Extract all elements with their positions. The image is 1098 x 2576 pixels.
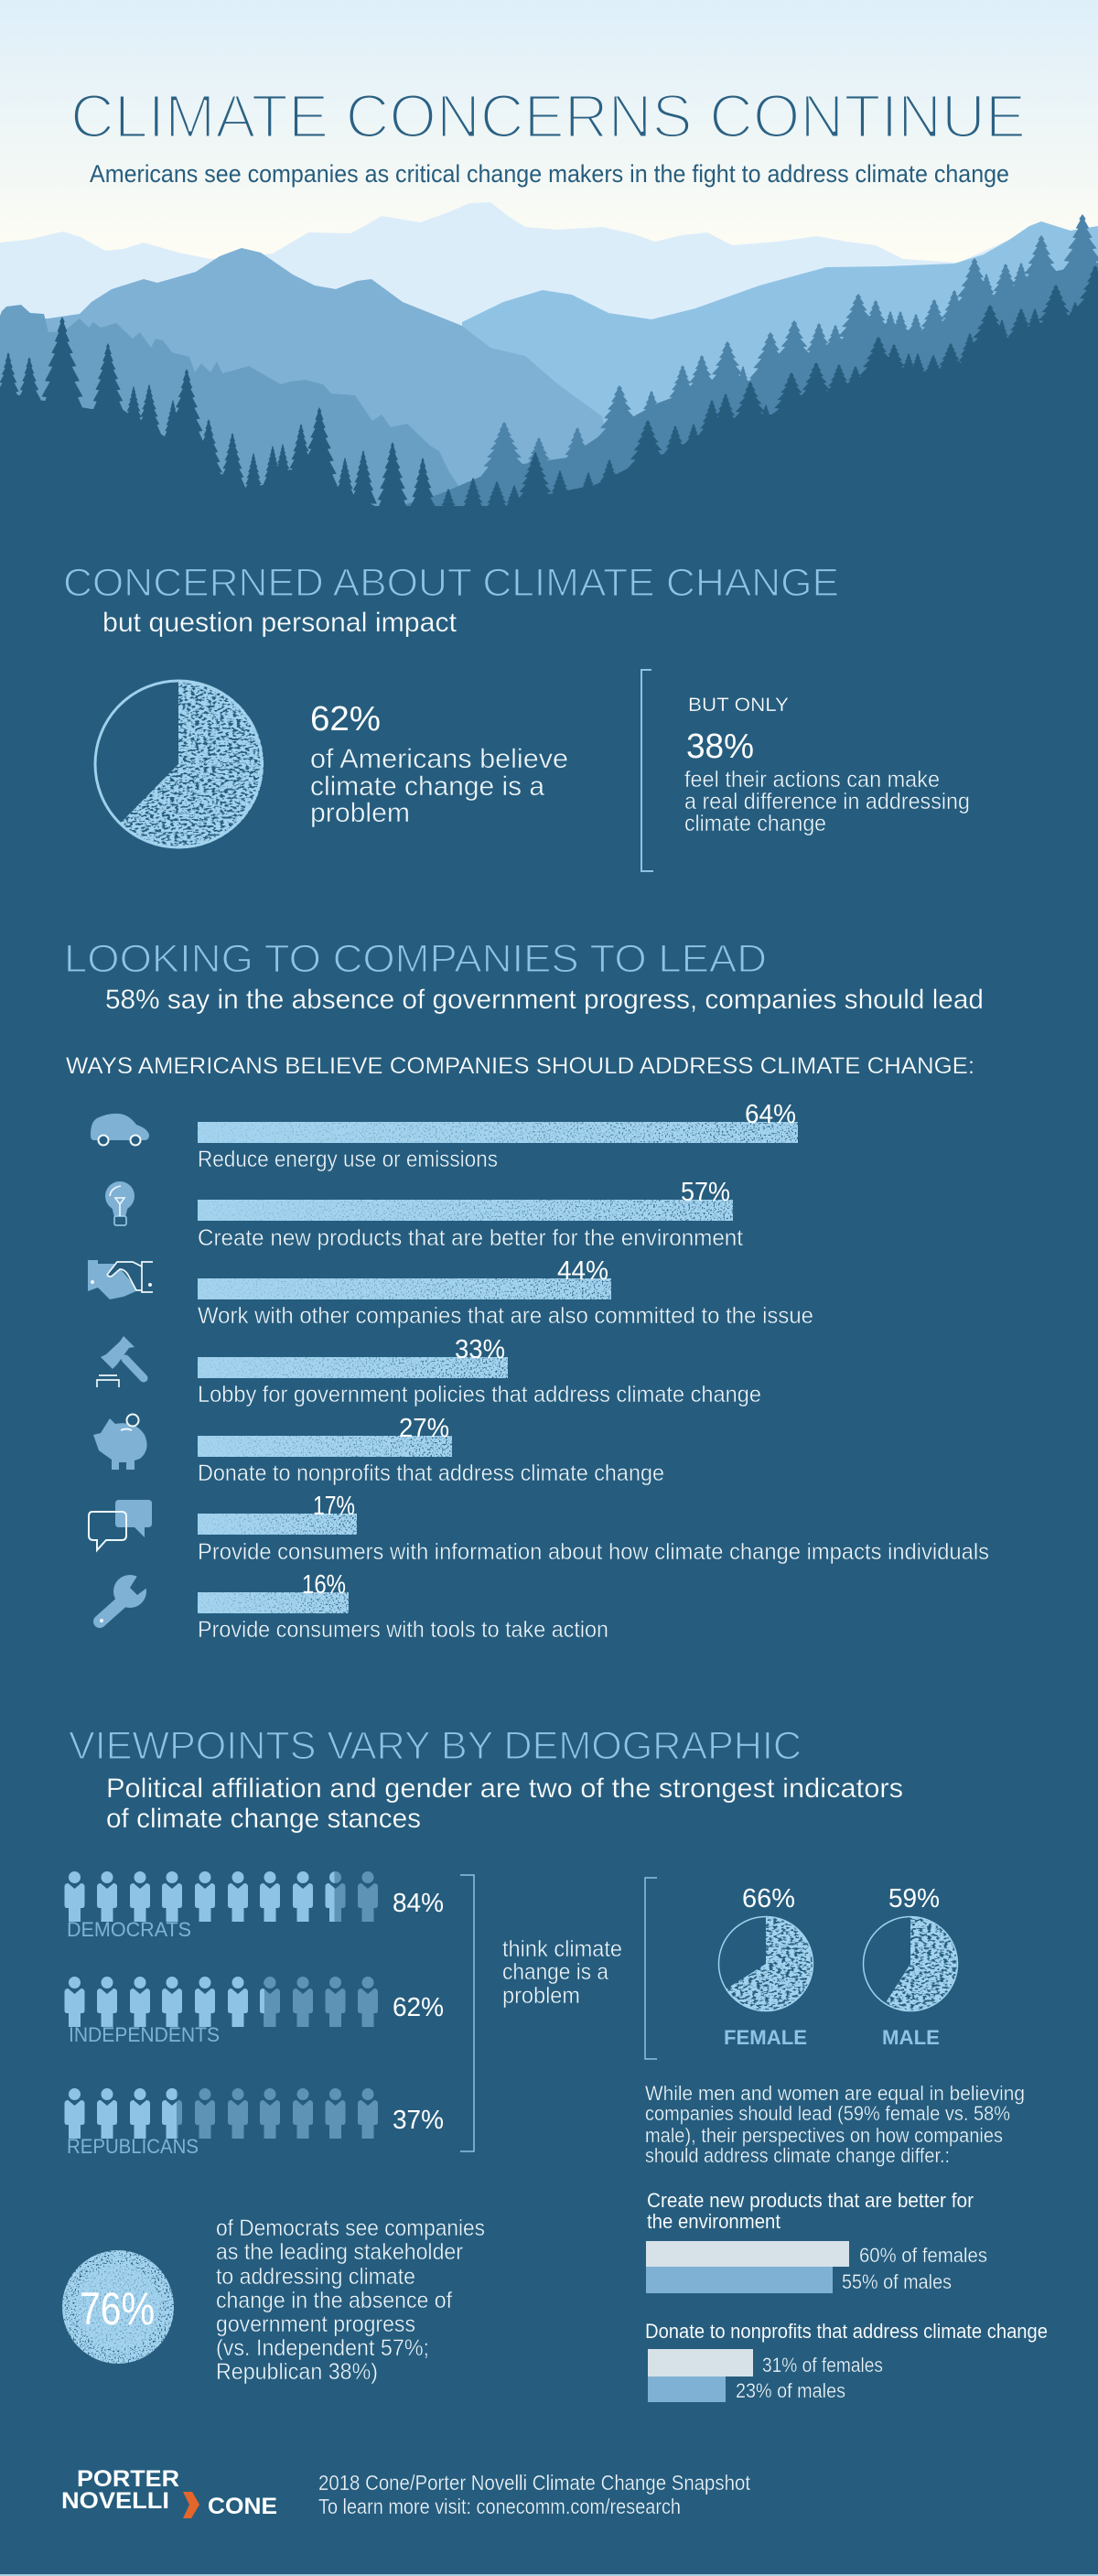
footer credit: To learn more visit: conecomm.com/research [318,2495,681,2518]
row: information [198,1492,989,1565]
stat: 38%: feel their actions can make [684,767,940,792]
bar chart: ways companies should address climate change [198,1100,989,1643]
text block: democrats: of Democrats see companies [216,2215,485,2241]
subtitle: Americans see companies as critical change makers in the fight to address climate change [90,160,1009,188]
row: new products [198,1178,743,1251]
row: donate [198,1414,664,1486]
row: tools: Provide consumers with tools to take action [198,1617,608,1643]
subheading: Political affiliation and gender are two of the strongest indicators [106,1773,903,1804]
pie chart: female 66%: FEMALE [724,2026,807,2049]
text block: democrats: as the leading stakeholder [216,2239,463,2265]
bracket [645,1878,657,2059]
bracket [460,1875,474,2151]
header landscape [0,0,1098,567]
bar chart: new products by gender [646,2189,987,2293]
logo: Porter Novelli Cone [61,2466,277,2519]
text block: democrats: change in the absence of [216,2288,452,2313]
icon: car [91,1114,149,1146]
panel: looking to companies to lead [64,937,989,1643]
bar chart: new products by gender: Create new products that are better for [647,2189,974,2212]
bar chart: new products by gender: 60% of females [859,2244,987,2267]
heading: VIEWPOINTS VARY BY DEMOGRAPHIC [69,1724,802,1768]
text block: gender perspectives: male), their perspectives on how companies [645,2124,1003,2147]
icon: speech bubbles [89,1500,152,1550]
pie chart: female 66%: 66% [742,1884,795,1913]
row: lobby [198,1335,761,1407]
pie chart: male 59% [864,1884,958,2049]
pictogram: independents 62% [64,1977,444,2046]
pictogram: republicans 37%: 37% [393,2106,444,2135]
row: donate: Donate to nonprofits that address climate change [198,1460,664,1486]
panel: viewpoints vary by demographic [62,1724,1048,2402]
row: new products: 57% [681,1178,730,1207]
label: think climate change is a problem: change is a [502,1959,608,1985]
text block: democrats: Republican 38%) [216,2359,378,2385]
title: CLIMATE CONCERNS CONTINUE [70,82,1026,151]
pictogram: republicans 37%: REPUBLICANS [67,2135,199,2158]
stat: 62% [310,700,568,828]
bar chart: new products by gender: the environment [647,2210,780,2233]
stat: 38% [684,695,970,836]
pictogram: republicans 37% [64,2088,444,2158]
bar chart: donate by gender: Donate to nonprofits that address climate change [645,2320,1048,2343]
stat circle: 76%: 76% [80,2283,155,2334]
stat: 38%: a real difference in addressing [684,789,970,814]
pictogram: democrats 84% [64,1871,444,1941]
stat: 62%: climate change is a [310,771,544,802]
pictogram: democrats 84%: 84% [393,1889,444,1918]
pictogram: independents 62%: 62% [393,1993,444,2022]
row: tools [198,1570,608,1643]
heading: LOOKING TO COMPANIES TO LEAD [64,937,767,981]
logo: Porter Novelli Cone: NOVELLI [61,2488,169,2514]
pictogram: democrats 84%: DEMOCRATS [67,1918,191,1941]
row: tools: 16% [302,1570,346,1600]
icon: handshake [88,1260,153,1299]
bar chart: new products by gender: 55% of males [842,2270,952,2293]
pictogram: independents 62%: INDEPENDENTS [69,2023,220,2046]
icon: gavel [97,1336,144,1387]
row: other companies: Work with other companies that are also committed to the issue [198,1303,813,1329]
subheading: but question personal impact [102,608,458,638]
subheading: 58% say in the absence of government progress, companies should lead [105,985,984,1015]
row: information: Provide consumers with information about how climate change impacts individuals [198,1539,989,1565]
panel: viewpoints vary by demographic: of climate change stances [106,1804,421,1834]
row: other companies: 44% [557,1256,608,1286]
row: reduce energy [198,1100,798,1172]
bar chart: donate by gender [645,2320,1048,2402]
row: reduce energy: 64% [745,1100,796,1129]
pie chart: male 59%: 59% [888,1884,940,1913]
row: other companies [198,1256,813,1329]
bracket [641,670,653,871]
row: new products: Create new products that are better for the environment [198,1225,743,1251]
text block: gender perspectives: should address climate change differ.: [645,2144,950,2167]
row: lobby: Lobby for government policies that address climate change [198,1382,761,1407]
stat: 38%: 38% [686,728,754,766]
stat: 62%: of Americans believe [310,744,568,774]
row: lobby: 33% [455,1335,505,1364]
text block: democrats: government progress [216,2312,415,2337]
icon: piggy bank [93,1415,147,1470]
bar chart: donate by gender: 23% of males [736,2379,845,2402]
text block: democrats: to addressing climate [216,2264,415,2290]
icon: light bulb [105,1181,135,1225]
label: think climate change is a problem [502,1936,622,2009]
bar chart: donate by gender: 31% of females [762,2354,883,2377]
logo: Porter Novelli Cone: PORTER [77,2466,179,2492]
stat: 38%: climate change [684,811,826,836]
pie chart: male 59%: MALE [882,2026,940,2049]
text block: gender perspectives [645,2082,1025,2167]
label: think climate change is a problem: think climate [502,1936,622,1962]
icon: wrench [100,1569,152,1622]
heading: CONCERNED ABOUT CLIMATE CHANGE [63,561,839,605]
stat circle: 76% [62,2250,174,2364]
bar chart title: WAYS AMERICANS BELIEVE COMPANIES SHOULD ADDRESS CLIMATE CHANGE: [66,1053,974,1079]
stat: 62%: problem [310,798,410,828]
text block: democrats: (vs. Independent 57%; [216,2335,429,2361]
panel: concerned about climate change [63,561,970,871]
row: donate: 27% [399,1414,449,1443]
label: think climate change is a problem: problem [502,1983,580,2009]
footer credit [318,2471,751,2518]
text block: democrats [216,2215,485,2385]
text block: gender perspectives: While men and women are equal in believing [645,2082,1025,2105]
stat: 62%: 62% [310,700,381,738]
logo: Porter Novelli Cone: CONE [208,2494,277,2519]
text block: gender perspectives: companies should lead (59% female vs. 58% [645,2102,1010,2125]
pie chart: 62% [95,680,264,848]
row: information: 17% [313,1492,355,1521]
footer credit: 2018 Cone/Porter Novelli Climate Change Snapshot [318,2471,751,2495]
row: reduce energy: Reduce energy use or emissions [198,1147,498,1172]
pie chart: female 66% [719,1884,813,2049]
stat: 38%: BUT ONLY [688,695,789,716]
